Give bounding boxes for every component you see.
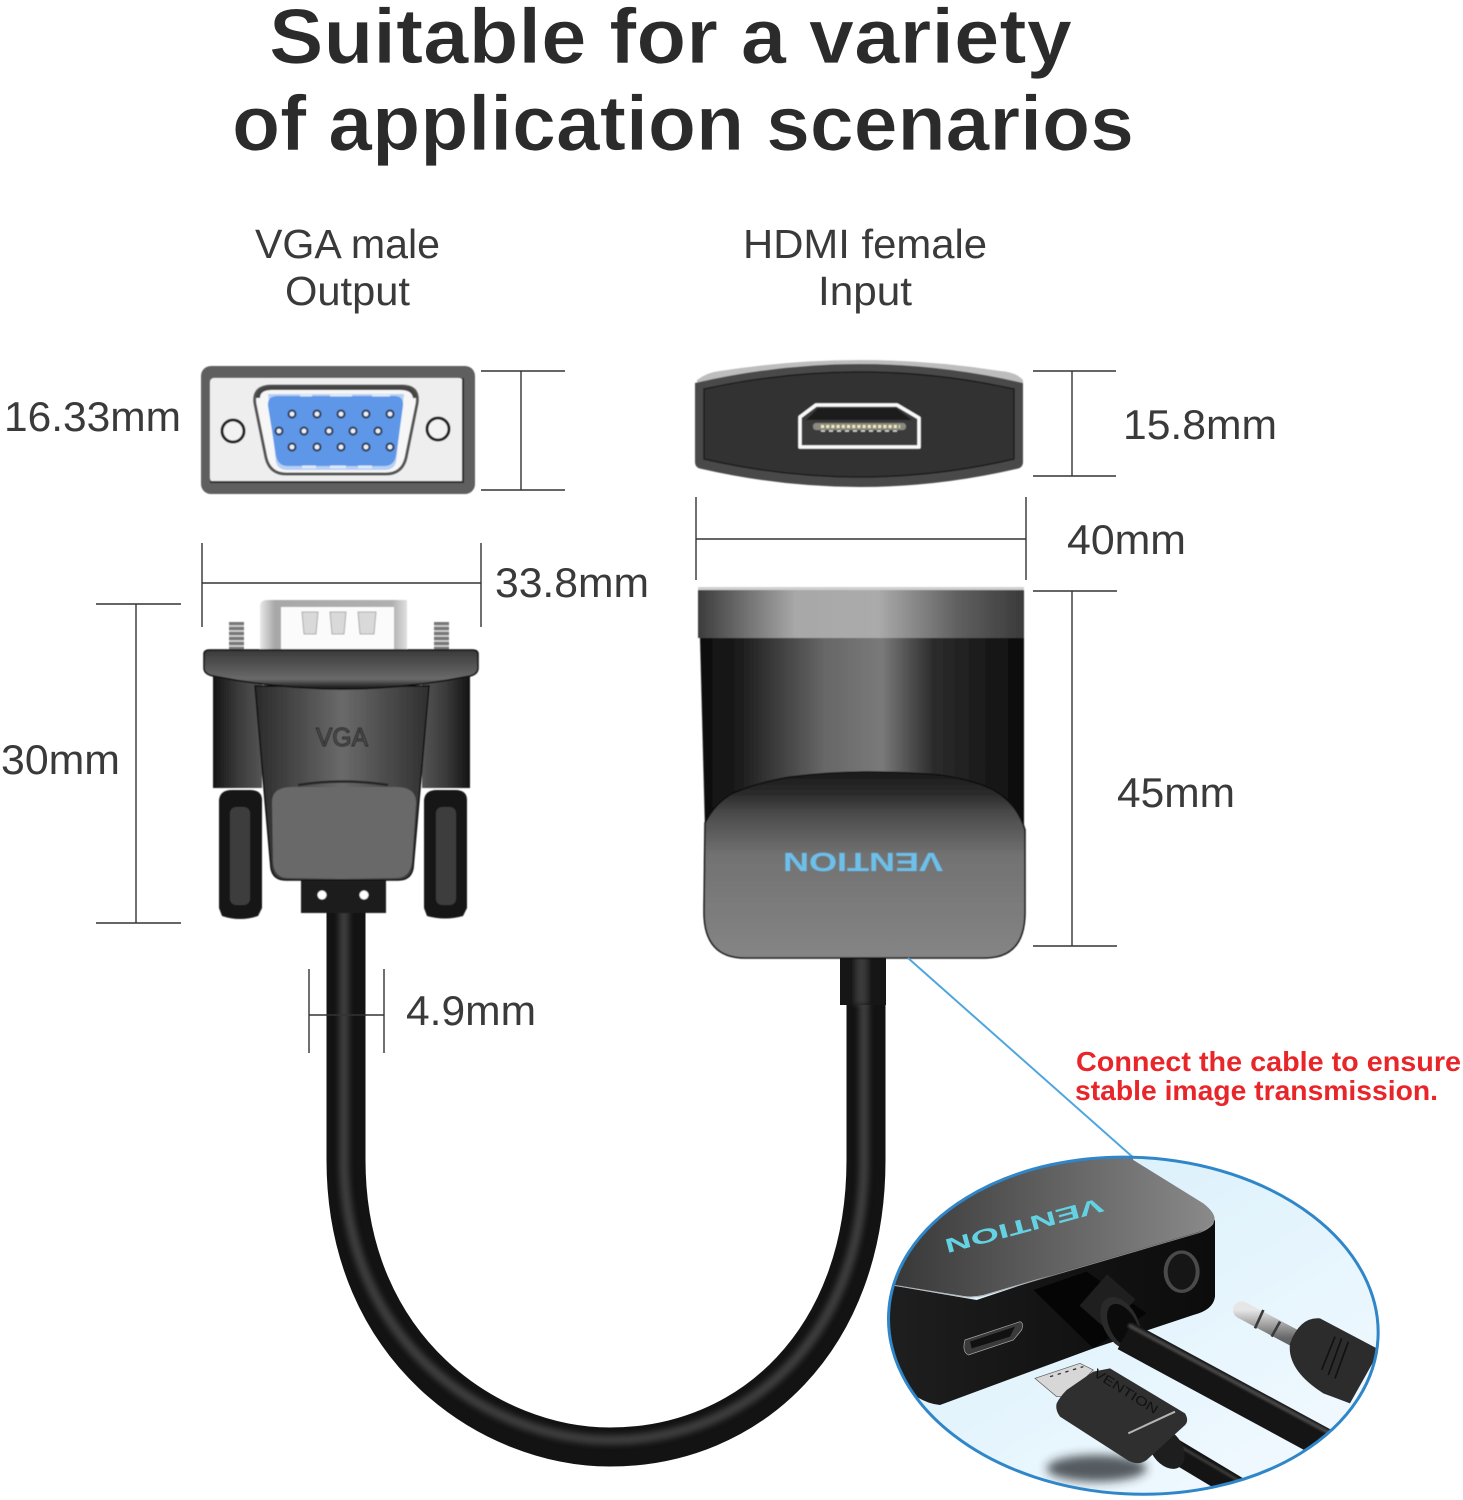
VENTION logo on inset: VENTION: [942, 1193, 1106, 1256]
dimension: HDMI adapter length: 45mm: [1117, 769, 1235, 816]
label: HDMI female input: [743, 221, 987, 314]
dimension: VGA plug length: 30mm: [1, 736, 120, 783]
icon: VGA plug side view: [204, 600, 478, 919]
VENTION logo: VENTION: [783, 847, 943, 877]
dimension: cable diameter: 4.9mm: [406, 987, 536, 1034]
cable: connecting VGA plug and HDMI adapter: [344, 905, 886, 1447]
title: of application scenarios: [232, 79, 1134, 167]
dimension: VGA width: [202, 543, 649, 627]
micro USB plug: [1035, 1363, 1093, 1397]
label: VGA male output: [255, 221, 440, 314]
label: VGA male output: VGA male: [255, 221, 440, 267]
micro USB socket: [964, 1322, 1023, 1355]
video cable boot: [1093, 1290, 1122, 1315]
label: HDMI female input: Input: [818, 268, 913, 314]
audio plug: [1242, 1310, 1295, 1338]
icon: HDMI adapter body: [698, 587, 1025, 958]
callout line: [908, 958, 1136, 1160]
dimension: VGA plug length: [1, 604, 181, 923]
label: HDMI female input: HDMI female: [743, 221, 987, 267]
dimension: VGA front height: [4, 371, 565, 490]
callout text: Connect the cable to ensure: [1076, 1046, 1461, 1077]
VGA moulded mark: VGA: [316, 722, 369, 752]
title: [232, 0, 1134, 167]
inset: magnified adapter ports: VENTION: [1091, 1366, 1161, 1417]
dimension: HDMI front height: 15.8mm: [1123, 401, 1277, 448]
audio jack socket: [1164, 1250, 1200, 1293]
video cable: [1125, 1336, 1333, 1448]
icon: HDMI port front view: [695, 360, 1023, 487]
dimension: cable diameter: [309, 969, 536, 1053]
icon: VGA connector front view: [201, 366, 475, 494]
callout text: stable image transmission.: [1075, 1075, 1438, 1106]
dimension: HDMI adapter length: [1033, 591, 1235, 946]
dimension: HDMI front height: [1033, 371, 1277, 476]
dimension: VGA width: 33.8mm: [495, 559, 649, 606]
dimension: HDMI width: 40mm: [1067, 516, 1186, 563]
adapter body sides: [880, 1220, 1215, 1405]
callout text: [1075, 1046, 1461, 1106]
adapter top face: [895, 1158, 1215, 1296]
dimension: VGA front height: 16.33mm: [4, 393, 181, 440]
dimension: HDMI width: [696, 497, 1186, 580]
label: VGA male output: Output: [285, 268, 411, 314]
inset: magnified adapter ports: [887, 1156, 1380, 1496]
